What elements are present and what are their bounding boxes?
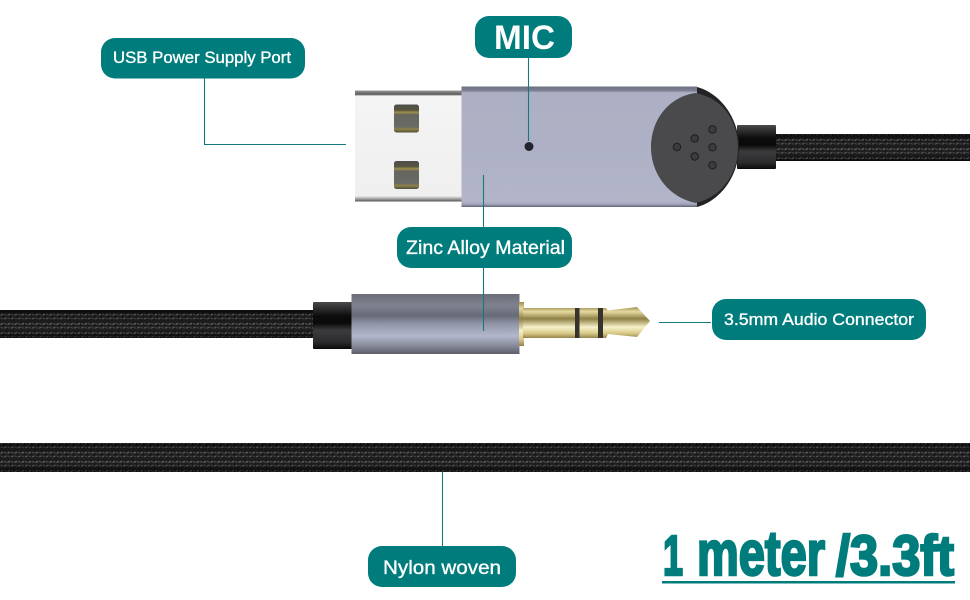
USB contact window top: [394, 104, 419, 132]
USB strain relief collar: [737, 125, 776, 169]
label: USB Power Supply Port: [101, 38, 305, 78]
label: Nylon woven: [368, 546, 516, 587]
3.5mm audio jack: [0, 294, 650, 354]
USB contact window bottom: [394, 161, 419, 189]
leader lines: [204, 56, 711, 547]
label: Zinc Alloy Material: [397, 227, 572, 268]
label: MIC: MIC: [494, 19, 555, 57]
jack metal barrel: [352, 294, 520, 354]
gold plug: [519, 302, 650, 346]
label: USB Power Supply Port: USB Power Supply Port: [113, 48, 291, 67]
USB plug: [355, 90, 462, 202]
jack strain relief collar: [313, 302, 352, 349]
USB microphone adapter: [355, 86, 970, 207]
jack braided cable: [0, 310, 314, 338]
microphone pinhole: [524, 142, 534, 151]
nylon woven cable: [0, 443, 970, 472]
label: 3.5mm Audio Connector: 3.5mm Audio Connector: [724, 310, 914, 329]
label: Nylon woven: Nylon woven: [383, 558, 501, 579]
length callout: 1 meter /3.3ft: 1: [663, 524, 683, 588]
length callout: 1 meter /3.3ft: [662, 519, 955, 589]
USB braided cable: [776, 134, 970, 161]
microphone cap: [651, 87, 739, 207]
length callout: 1 meter /3.3ft: meter: [697, 519, 825, 589]
microphone holes: [673, 126, 716, 169]
label: MIC: [475, 16, 572, 58]
label: 3.5mm Audio Connector: [712, 299, 926, 340]
label: Zinc Alloy Material: Zinc Alloy Material: [406, 238, 565, 259]
zinc alloy housing: [462, 86, 697, 207]
length callout: 1 meter /3.3ft: /3.3ft: [836, 524, 954, 588]
